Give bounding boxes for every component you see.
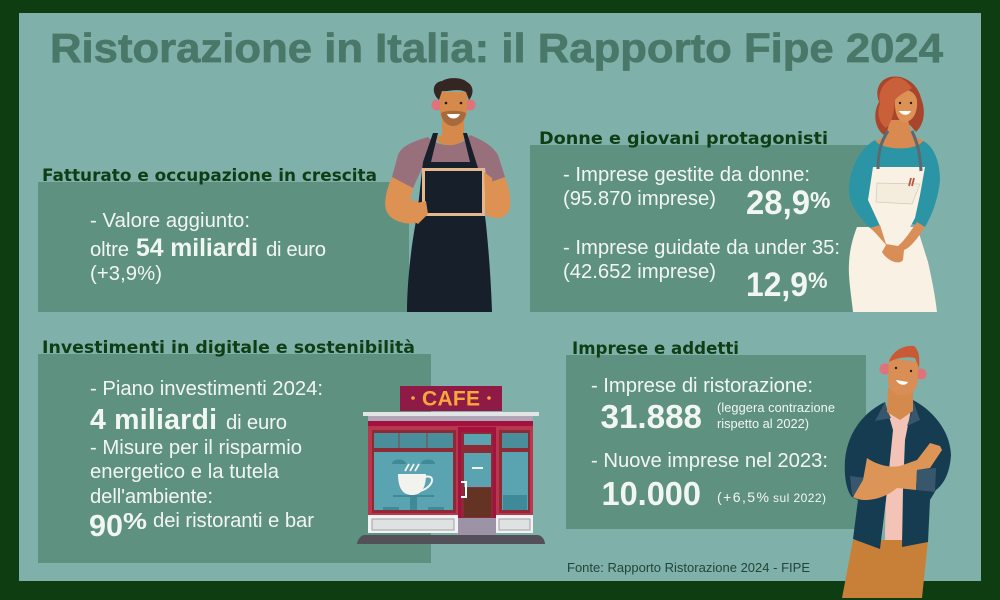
text: imprese donne: % (810, 187, 830, 213)
side window (499, 430, 530, 513)
cafe sign (400, 386, 502, 411)
title: Ristorazione in Italia: il Rapporto Fipe 2024 (50, 25, 944, 71)
crossed arms (853, 443, 942, 500)
collars (875, 402, 891, 421)
text: imprese under 35 (563, 237, 840, 304)
panel: imprese e addetti (566, 339, 866, 529)
lamps and table (383, 460, 444, 510)
left cuff (850, 476, 866, 497)
trousers (842, 540, 928, 598)
apron bib (868, 167, 925, 246)
arms (385, 172, 510, 224)
ground (357, 535, 545, 544)
text: valore aggiunto: di euro (266, 239, 326, 261)
text: nuove imprese: (+6,5% (717, 489, 769, 505)
neck (887, 388, 913, 420)
hair front (878, 77, 912, 128)
text: piano investimenti: - Piano investimenti 2024: (90, 378, 323, 400)
apron (407, 133, 492, 312)
text: imprese donne (563, 164, 830, 222)
text: imprese donne: 28,9 (746, 184, 810, 222)
hair (434, 78, 473, 100)
ears (880, 364, 890, 374)
text: piano investimenti: 90 (89, 508, 123, 543)
text: imprese ristorazione: (leggera contrazione (717, 400, 835, 415)
text: imprese ristorazione (591, 375, 835, 436)
illustration: cafe storefront (357, 386, 545, 544)
skirt (849, 227, 937, 312)
panel: investimenti (38, 338, 431, 563)
text: nuove imprese (591, 450, 828, 513)
text: valore aggiunto: oltre (90, 239, 129, 261)
arms and hands (870, 222, 925, 262)
text: piano investimenti: di euro (226, 412, 287, 434)
steps (458, 518, 496, 535)
hands (408, 201, 428, 224)
sweater (849, 140, 940, 228)
text: imprese under 35: (42.652 imprese) (563, 261, 716, 283)
main window (372, 430, 456, 513)
illustration: cafe storefront: CAFE (422, 388, 480, 410)
panel: fatturato (38, 166, 409, 312)
text: imprese ristorazione: - Imprese di ristorazione: (591, 375, 813, 397)
door (458, 427, 496, 518)
face (895, 90, 917, 122)
text: piano investimenti: % (123, 508, 147, 534)
shirt (392, 135, 505, 188)
text: piano investimenti: 4 miliardi (90, 404, 217, 436)
text: piano investimenti: - Misure per il risparmio (90, 437, 302, 459)
neck and chest (874, 120, 926, 150)
text: valore aggiunto (90, 210, 326, 285)
text: piano investimenti: dei ristoranti e bar (153, 510, 314, 532)
face (440, 92, 467, 126)
text: valore aggiunto: - Valore aggiunto: (90, 210, 250, 232)
hair back (875, 76, 924, 135)
text: imprese ristorazione: 31.888 (600, 399, 702, 436)
ears (432, 100, 442, 110)
text: piano investimenti (89, 378, 323, 543)
jacket left (845, 402, 893, 549)
right cuff (916, 468, 936, 492)
chalkboard (424, 170, 484, 214)
text: imprese under 35: % (808, 268, 828, 293)
text: imprese donne: - Imprese gestite da donne: (563, 164, 810, 186)
pen (909, 178, 914, 186)
text: imprese ristorazione: rispetto al 2022) (717, 416, 809, 431)
text: valore aggiunto: 54 miliardi (136, 235, 258, 262)
illustration: man with crossed arms (842, 346, 951, 598)
illustration: waitress (849, 76, 940, 312)
panel: donne e giovani (530, 129, 870, 312)
heading: imprese: Imprese e addetti (572, 339, 739, 359)
text: nuove imprese: sul 2022) (773, 491, 826, 505)
text: imprese under 35: - Imprese guidate da under 35: (563, 237, 840, 259)
heading: investimenti: Investimenti in digitale e sostenibilità (42, 338, 415, 358)
text: nuove imprese: - Nuove imprese nel 2023: (591, 450, 828, 472)
text: imprese under 35: 12,9 (746, 266, 808, 304)
illustration: barista with chalkboard (385, 78, 510, 312)
shirt underlay (885, 412, 912, 540)
jacket right (902, 400, 951, 547)
head (888, 358, 919, 395)
hair (889, 346, 919, 368)
planters (368, 515, 458, 533)
roof (363, 412, 539, 416)
heading: fatturato: Fatturato e occupazione in crescita (42, 166, 377, 186)
source note: Fonte: Rapporto Ristorazione 2024 - FIPE (567, 560, 810, 575)
text: valore aggiunto: (+3,9%) (90, 263, 162, 285)
text: piano investimenti: energetico e la tutela (90, 461, 280, 483)
text: imprese donne: (95.870 imprese) (563, 188, 716, 210)
heading: donne: Donne e giovani protagonisti (539, 129, 828, 149)
text: nuove imprese: 10.000 (602, 476, 701, 513)
neck (435, 116, 467, 145)
apron pocket (876, 183, 920, 204)
facade (368, 421, 533, 518)
apron straps (878, 131, 921, 171)
text: piano investimenti: dell'ambiente: (90, 486, 213, 508)
coffee cup (398, 474, 426, 495)
